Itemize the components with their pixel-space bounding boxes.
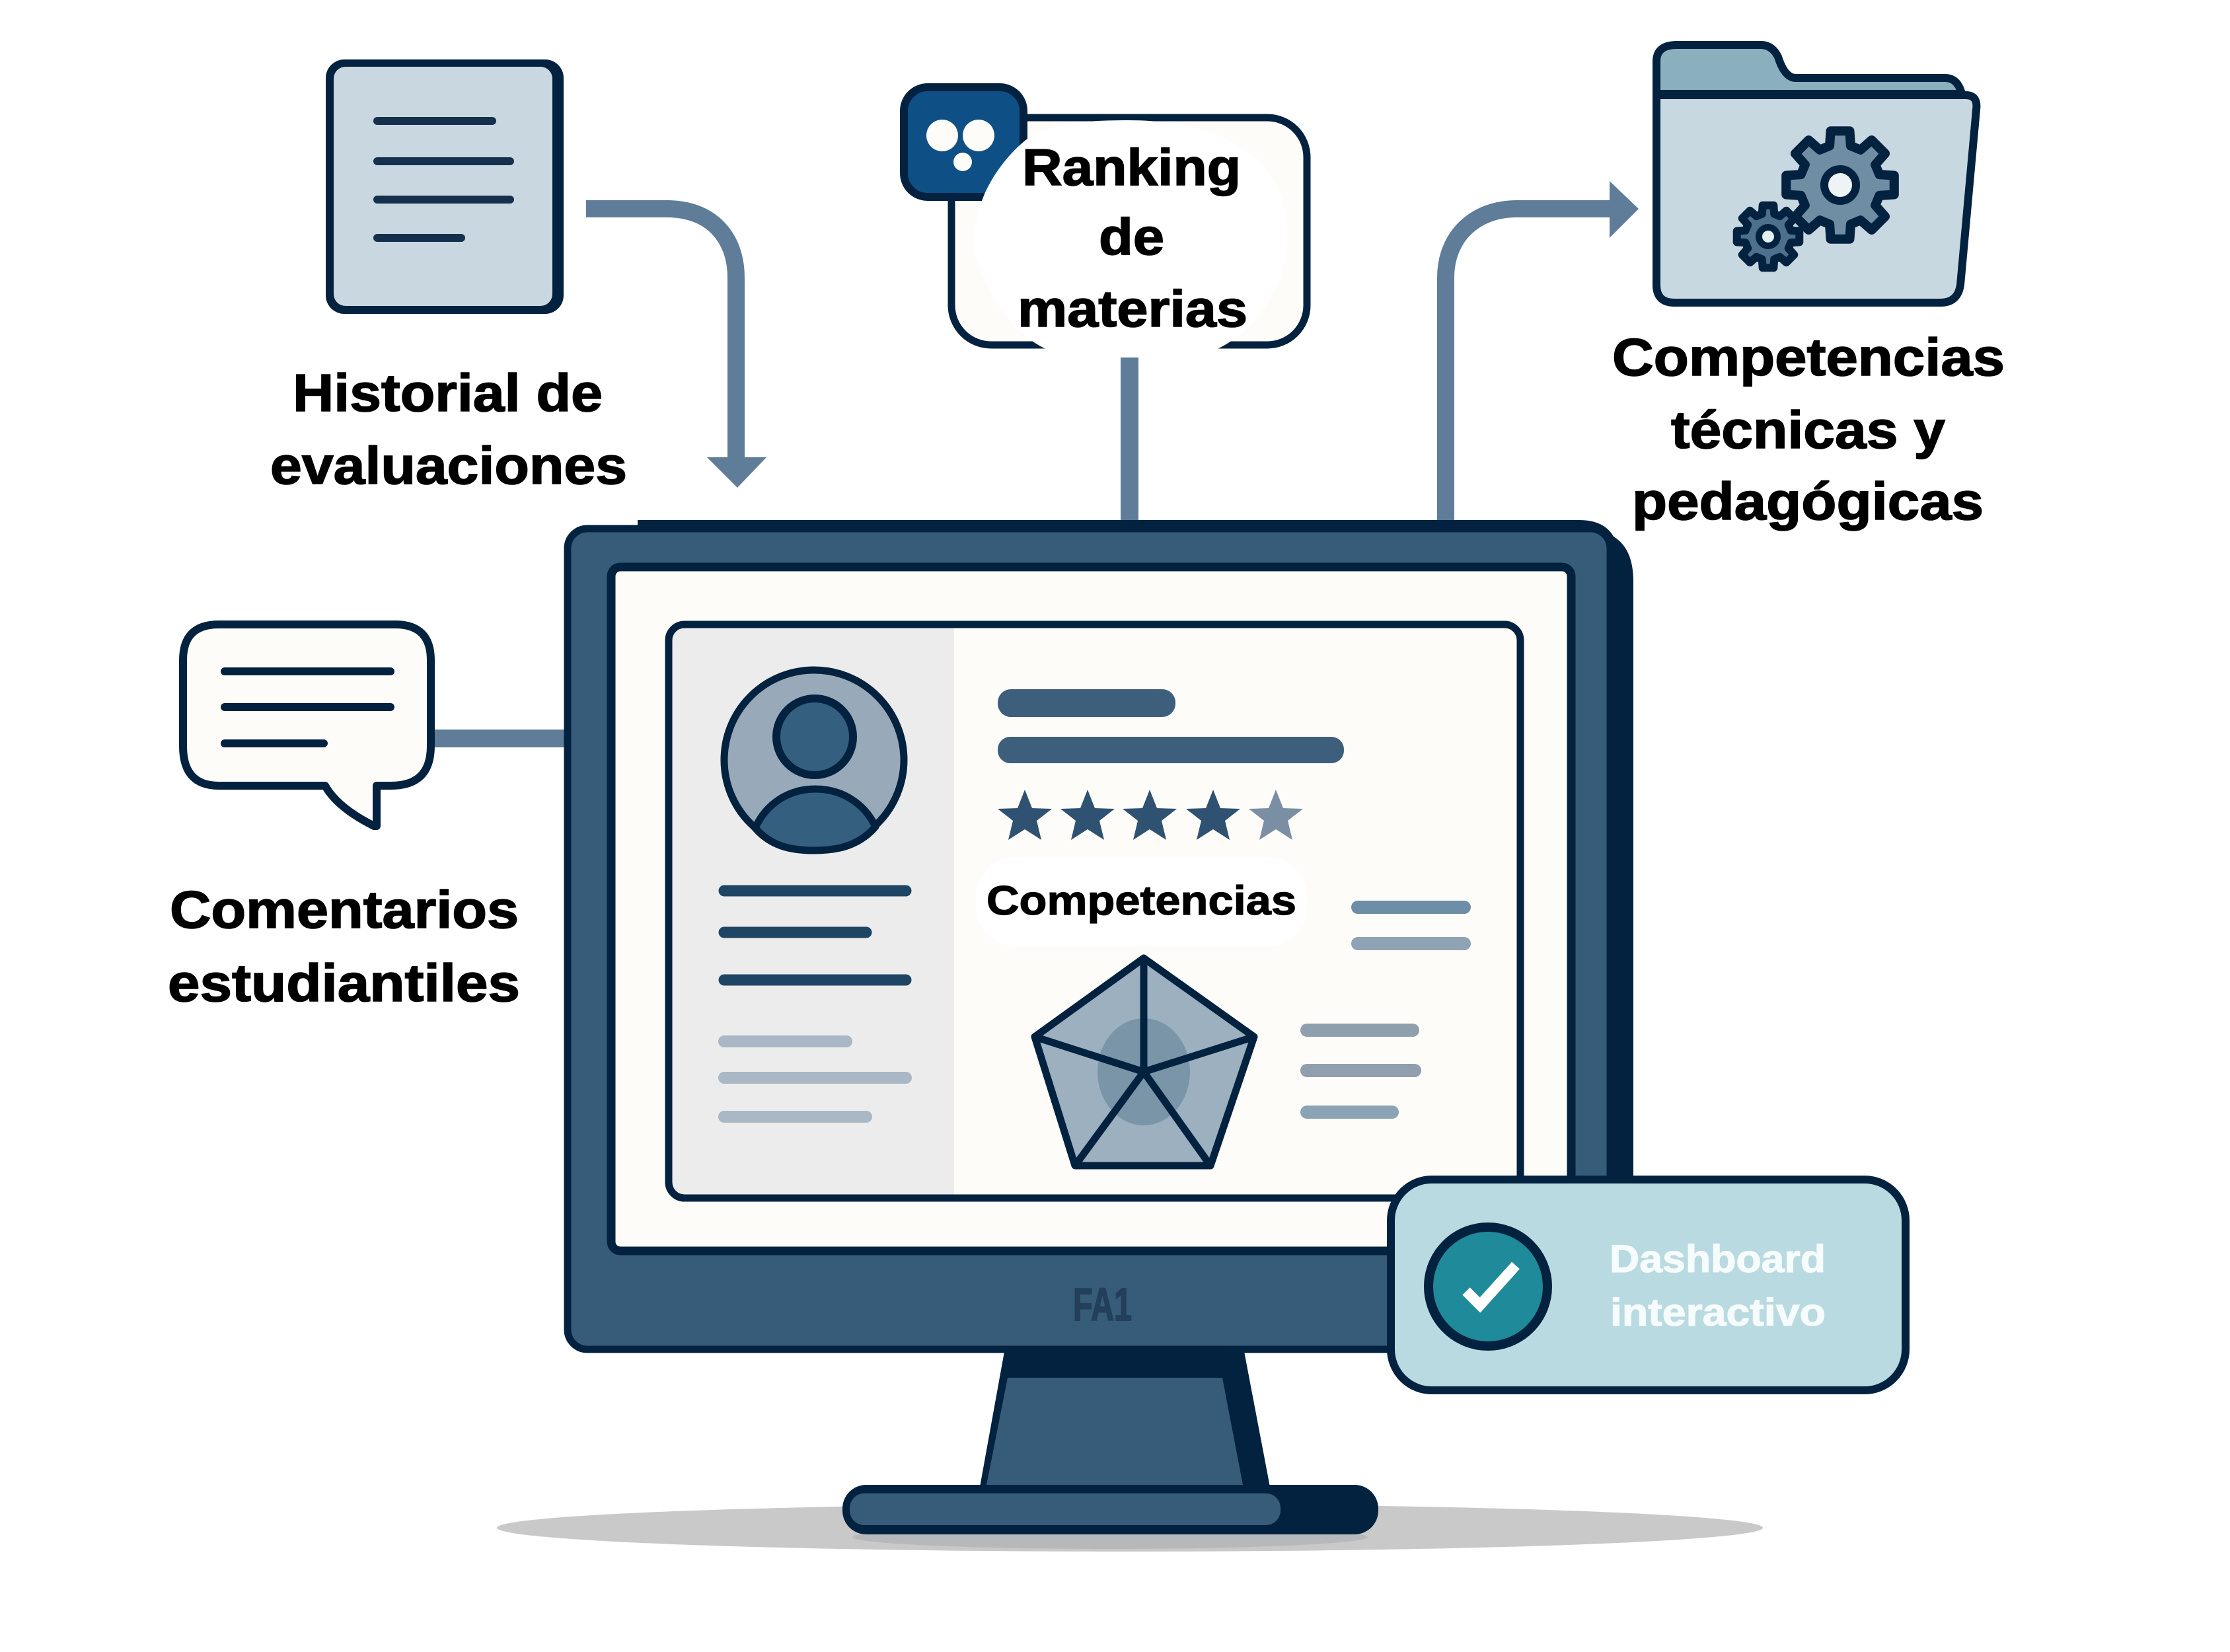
label: historial de evaluaciones: Historial de	[293, 363, 603, 422]
icon: document	[326, 59, 564, 314]
label: dashboard interactivo	[1610, 1238, 1826, 1334]
label: ranking de materias: materias	[1018, 280, 1247, 338]
panel: student profile	[669, 624, 1520, 1198]
label: ranking de materias: Ranking	[1022, 138, 1241, 196]
monitor bezel	[568, 529, 1610, 1349]
icon: blue badge	[904, 87, 1023, 197]
label: dashboard interactivo: interactivo	[1610, 1291, 1826, 1334]
label: ranking de materias	[1018, 138, 1247, 338]
label: competencias tecnicas y pedagogicas: Competencias	[1612, 328, 2005, 387]
header bars	[998, 689, 1344, 763]
monitor screen	[611, 567, 1571, 1251]
icon: folder with gears	[1656, 45, 1976, 303]
label: comentarios estudiantiles: estudiantiles	[168, 954, 520, 1012]
label: competencias tecnicas y pedagogicas: técnicas y	[1671, 400, 1946, 459]
panel: ranking de materias	[904, 87, 1307, 350]
label: competencias tecnicas y pedagogicas: pedagógicas	[1632, 472, 1984, 531]
label: dashboard interactivo: Dashboard	[1610, 1238, 1826, 1281]
monitor logo: FA1	[1073, 1279, 1132, 1330]
sidebar text lines: dark	[724, 891, 906, 980]
label: competencias	[976, 857, 1307, 946]
profile sidebar	[669, 624, 954, 1198]
arrow: historial to monitor	[586, 209, 766, 488]
label: comentarios estudiantiles: Comentarios	[170, 880, 519, 939]
monitor base	[842, 1485, 1378, 1534]
label: competencias: Competencias	[986, 878, 1296, 924]
icon: avatar	[724, 670, 904, 850]
legend lines upper	[1358, 907, 1464, 944]
icon: speech bubble	[183, 624, 431, 826]
sidebar text lines: light	[724, 1041, 906, 1117]
label: comentarios estudiantiles	[168, 880, 520, 1012]
star rating	[998, 790, 1303, 840]
label: historial de evaluaciones: evaluaciones	[270, 436, 627, 495]
label: ranking de materias: de	[1099, 207, 1164, 266]
icon: check badge	[1429, 1227, 1547, 1346]
connector: comentarios to monitor	[429, 730, 566, 747]
icon: large gear	[1786, 131, 1894, 239]
monitor stand	[980, 1348, 1270, 1487]
label: historial de evaluaciones	[270, 363, 627, 495]
radar chart	[1035, 958, 1254, 1166]
label: competencias tecnicas y pedagogicas	[1612, 328, 2005, 531]
arrow: monitor to competencias	[1446, 181, 1639, 522]
icon: small gear	[1737, 206, 1799, 268]
callout: dashboard interactivo	[1391, 1180, 1906, 1390]
floor shadow	[497, 1504, 1763, 1552]
monitor	[568, 520, 1633, 1349]
monitor back edge	[638, 520, 1633, 1189]
connector: ranking to monitor	[1121, 357, 1138, 523]
legend lines lower	[1307, 1030, 1415, 1112]
